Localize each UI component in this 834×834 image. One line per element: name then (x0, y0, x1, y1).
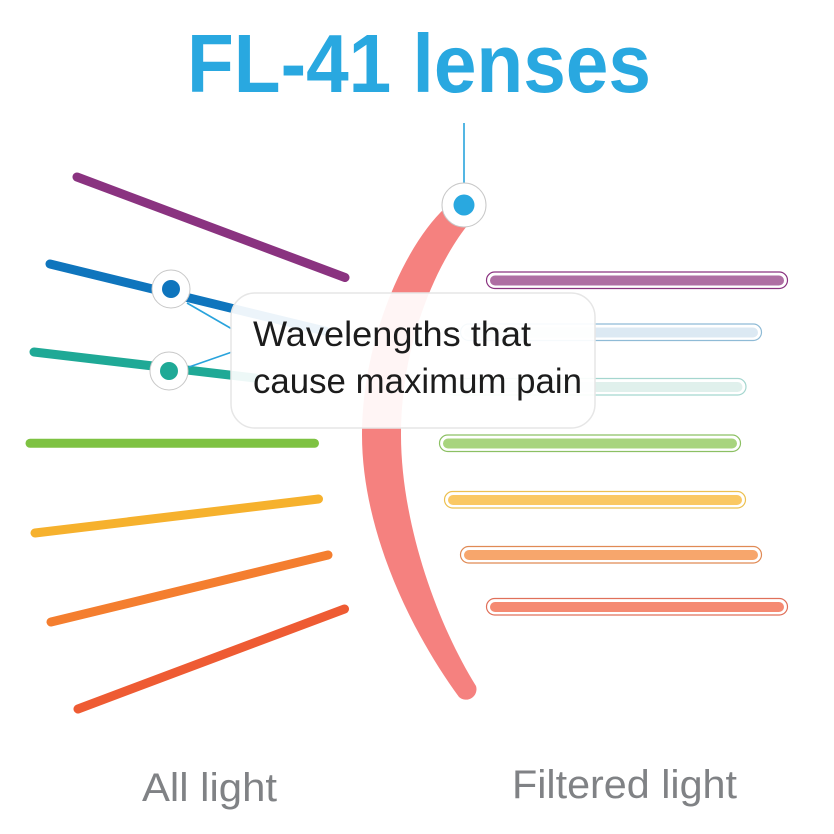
bar: filtered blue (460, 324, 762, 340)
connector lines (187, 123, 464, 367)
bar: filtered yellow (444, 492, 746, 508)
panel: incoming all light rays (30, 177, 345, 709)
marker: lens (442, 183, 486, 227)
callout (231, 293, 595, 428)
ray: yellow (35, 499, 318, 533)
ray: teal (34, 352, 255, 378)
bar: filtered orange (460, 546, 762, 563)
marker: teal ray (150, 352, 188, 390)
callout: cause maximum pain (253, 362, 582, 401)
label: all light: All light (142, 766, 277, 810)
callout: Wavelengths that (253, 315, 531, 354)
ray: red (78, 609, 344, 709)
ray: green (30, 439, 314, 448)
bar: filtered purple (486, 272, 788, 288)
ray: orange (51, 555, 328, 622)
bar: filtered green (440, 435, 740, 452)
lens (362, 208, 476, 700)
bar: filtered red (486, 598, 788, 615)
ray: purple (77, 177, 345, 278)
bar: filtered teal (445, 378, 746, 395)
title: FL-41 lenses (187, 17, 651, 110)
panel: filtered light bars (440, 272, 788, 615)
marker: blue ray (152, 270, 190, 308)
label: filtered light: Filtered light (512, 763, 737, 807)
ray: blue (50, 264, 325, 331)
